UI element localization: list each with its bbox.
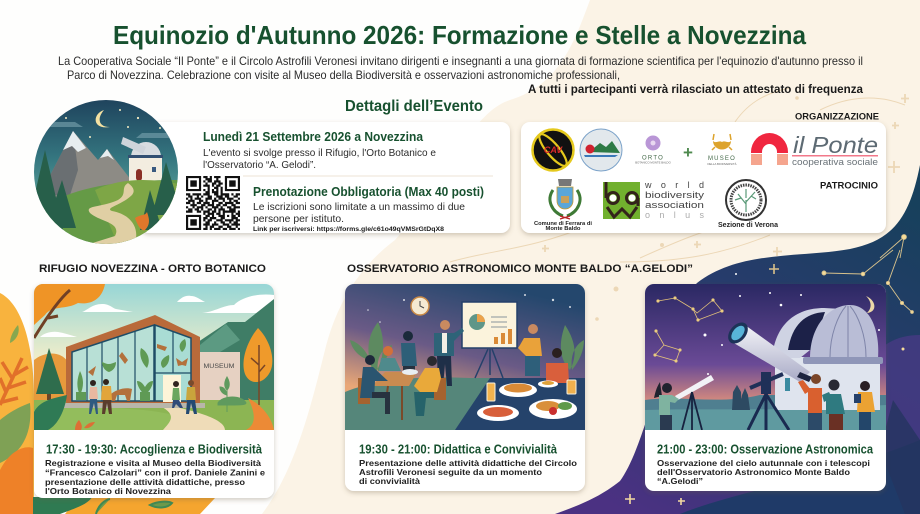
trees (36, 150, 175, 230)
logo: orto botanico: BOTANICO MONTE BALDO (635, 160, 672, 164)
logo: world biodiversity association: association (645, 200, 704, 211)
background: autumn foliage left (0, 293, 215, 514)
logo: sezione di verona (718, 180, 778, 229)
museum wing (198, 352, 240, 402)
illustration: observatory in mountains circle (34, 100, 178, 244)
heading: event details: Dettagli dell’Evento (345, 98, 483, 115)
big telescope (724, 319, 812, 430)
museum label: MUSEUM (204, 363, 235, 370)
observers (798, 374, 875, 430)
logo: world biodiversity association: onlus (645, 210, 704, 220)
food plates (477, 380, 577, 421)
session title: 19:30 - 21:00: Didattica e Convivialità (359, 442, 558, 456)
heading: observatory section: OSSERVATORIO ASTRONOMICO MONTE BALDO “A.GELODI” (347, 263, 693, 275)
moon (96, 110, 110, 127)
intro text (58, 54, 863, 82)
presenter right (518, 324, 542, 376)
panel: event details (140, 122, 510, 233)
autumn tree (243, 328, 272, 405)
session description: di convivialità (359, 476, 420, 486)
seated man right (546, 348, 569, 383)
glass building (66, 315, 200, 403)
panel: didactic session (345, 284, 585, 491)
background: cream wave (262, 0, 920, 514)
visitors (89, 379, 197, 414)
logo: sezione di verona: Sezione di Verona (718, 222, 778, 229)
logo: il Ponte (751, 132, 878, 168)
booking text: Le iscrizioni sono limitate a un massimo di due (253, 201, 465, 213)
foreground plants (34, 395, 67, 430)
event location text (203, 147, 436, 171)
panel: organizers and sponsors (521, 112, 886, 233)
session description (45, 458, 265, 496)
session title: 21:00 - 23:00: Osservazione Astronomica (657, 442, 874, 456)
logo: comune di ferrara crest: Monte Baldo (546, 226, 581, 232)
QR code (185, 175, 241, 231)
logo: il Ponte: cooperativa sociale (792, 157, 878, 168)
logo: museo (707, 134, 737, 166)
event location text: L'evento si svolge presso il Rifugio, l'Orto Botanico e (203, 147, 436, 159)
title: Equinozio d'Autunno 2026: Formazione e Stelle a Novezzina (113, 20, 806, 50)
session description: Presentazione delle attività didattiche del Circolo (359, 458, 577, 468)
label: organization: ORGANIZZAZIONE (795, 112, 879, 122)
seated group and table (358, 331, 446, 420)
heading: rifugio section: RIFUGIO NOVEZZINA - ORTO BOTANICO (39, 263, 266, 275)
session description (359, 458, 577, 486)
presentation board (462, 302, 517, 378)
booking heading: Prenotazione Obbligatoria (Max 40 posti) (253, 184, 484, 199)
panel: biodiversity session (34, 284, 274, 498)
exhibits (76, 339, 186, 401)
illustration: telescopes and observatory (645, 284, 886, 430)
background: constellation lines on cream (450, 88, 909, 321)
trail (88, 183, 136, 244)
session description: Registrazione e visita al Museo della Biodiversità (45, 458, 261, 468)
session description: dell'Osservatorio Astronomico Monte Baldo (657, 467, 850, 477)
intro text: La Cooperativa Sociale “Il Ponte” e il Circolo Astrofili Veronesi invitano dirigenti e insegnanti a una giornata di formazione scientifica per l'equinozio d'autunno presso il (58, 54, 863, 68)
session description: “Francesco Calzolari” con il prof. Daniele Zanini e (45, 468, 265, 478)
session description: l'Orto Botanico di Novezzina (45, 486, 171, 496)
booking text (253, 201, 465, 225)
moon (866, 296, 874, 313)
logo: monte baldo circle (580, 129, 622, 171)
session description (657, 458, 870, 486)
booking text: persone per istituto. (253, 213, 344, 225)
pine tree (36, 348, 64, 394)
logo: comune di ferrara crest: Comune di Ferrara di (534, 221, 592, 227)
logo: astrofili circle (532, 130, 574, 170)
logo: orto botanico (635, 136, 672, 164)
session description: Osservazione del cielo autunnale con i telescopi (657, 458, 870, 468)
logo: world biodiversity association: biodiversity (645, 190, 704, 201)
logo: astrofili circle: CAV (544, 145, 563, 155)
logo: il Ponte: il Ponte (793, 132, 878, 158)
observatory (121, 137, 163, 181)
star constellations (654, 297, 723, 362)
session description: “A.Gelodi” (657, 476, 703, 486)
session description: Astrofili Veronesi seguite da un momento (359, 467, 542, 477)
background: night sky wave (555, 165, 920, 514)
event location text: l'Osservatorio “A. Gelodi”. (203, 159, 316, 171)
panel: astronomy session (645, 284, 886, 491)
wall clock (411, 297, 429, 315)
certificate note: A tutti i partecipanti verrà rilasciato un attestato di frequenza (528, 84, 864, 96)
logo: orto botanico: ORTO (642, 156, 664, 162)
logo: museo: MUSEO (708, 156, 736, 162)
event date: Lunedì 21 Settembre 2026 a Novezzina (203, 129, 424, 144)
logo: museo: DELLA BIODIVERSITÀ (707, 162, 737, 166)
intro text: Parco di Novezzina. Celebrazione con visite al Museo della Biodiversità e osservazioni astronomiche professionali, (67, 68, 620, 82)
label: patronage: PATROCINIO (820, 180, 878, 192)
constellation (822, 235, 913, 313)
small telescope and woman (654, 375, 714, 430)
ground (34, 400, 274, 430)
plants (350, 322, 584, 372)
illustration: museum (34, 284, 274, 430)
logo: world biodiversity association (603, 180, 704, 220)
logo: world biodiversity association: world (644, 180, 704, 190)
session description: presentazione delle attività didattiche, presso (45, 477, 245, 487)
logo: comune di ferrara crest (534, 179, 592, 232)
booking link: Link per iscriversi: https://forms.gle/c61o49qVMSrGtDqX8 (253, 226, 444, 233)
presenter (434, 320, 464, 386)
icon: plus: + (683, 143, 693, 162)
session title: 17:30 - 19:30: Accoglienza e Biodiversità (46, 442, 263, 456)
illustration: meeting and dinner (345, 284, 585, 430)
sapling and bushes (218, 377, 246, 412)
observatory dome (772, 305, 883, 410)
